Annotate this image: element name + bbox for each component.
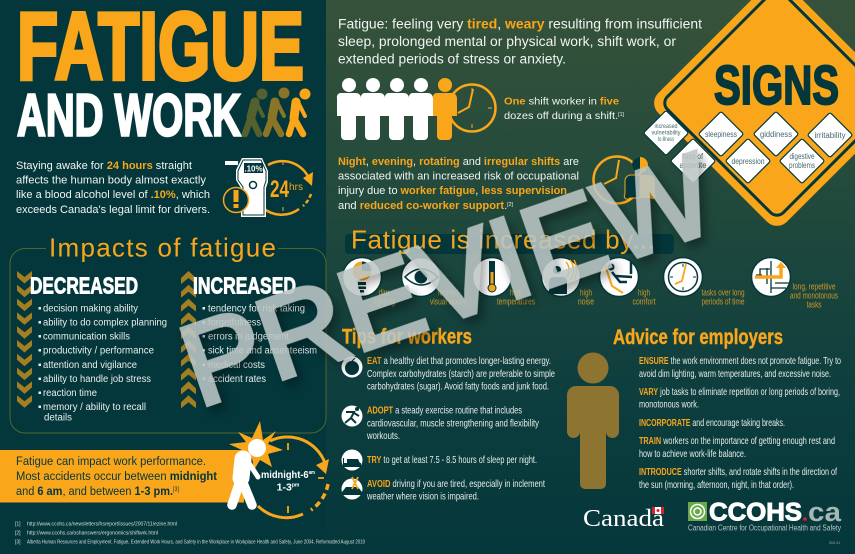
text block: tips for workers: TRY to get at least 7.5 - 8.5 hours of sleep per night. bbox=[367, 454, 537, 466]
sign: digestive problems bbox=[779, 138, 825, 184]
text block: 24 hours bbox=[16, 160, 210, 216]
icon: runner bbox=[342, 406, 362, 426]
text block: references: [2] bbox=[15, 530, 21, 536]
icon: clock with sun and walking figure: pm bbox=[292, 482, 300, 488]
heading: tips for workers: Tips for workers bbox=[342, 326, 472, 348]
panel: left background bbox=[0, 0, 326, 554]
list: decreased: communication skills bbox=[43, 332, 130, 342]
sign: loss of appetite: loss of bbox=[683, 152, 704, 161]
list: decreased: ▪ bbox=[38, 332, 42, 342]
list: decreased: attention and vigilance bbox=[43, 360, 137, 371]
icon: up chevrons bbox=[181, 271, 196, 408]
labels: fatigue factors: long, repetitive bbox=[792, 282, 836, 292]
sign: depression: depression bbox=[732, 157, 764, 166]
text block: definition of fatigue: extended periods of stress or anxiety. bbox=[338, 52, 566, 66]
list: increased: sick time and absenteeism bbox=[208, 346, 317, 356]
icon: five workers and clock bbox=[337, 78, 496, 140]
text block: one in five: dozes off during a shift. bbox=[504, 110, 612, 122]
heading: impacts of fatigue: Impacts of fatigue bbox=[49, 232, 276, 262]
sign: loss of appetite: appetite bbox=[680, 161, 707, 170]
text block: definition of fatigue bbox=[338, 16, 702, 66]
labels: fatigue factors: comfort bbox=[632, 296, 656, 306]
list: decreased: ▪ bbox=[38, 374, 42, 385]
icon: breathalyzer and 24 hours clock: .10% bbox=[244, 164, 263, 174]
logo: CCOHS bbox=[688, 497, 842, 532]
heading: decreased: DECREASED bbox=[30, 272, 138, 298]
icon: clock with sun and walking figure bbox=[229, 421, 329, 518]
text block: shifts: [2] bbox=[507, 202, 514, 208]
list: decreased: ▪ bbox=[38, 402, 42, 413]
heading: advice for employers: Advice for employers bbox=[613, 326, 783, 349]
icon: breathalyzer and 24 hours clock bbox=[224, 158, 313, 217]
logo: Canada wordmark: Canada bbox=[583, 506, 664, 532]
labels: fatigue factors: visual acuity bbox=[430, 296, 466, 306]
labels: fatigue factors: high bbox=[638, 288, 650, 298]
list: decreased: ability to do complex planning bbox=[43, 318, 167, 328]
list: increased: accident rates bbox=[208, 374, 266, 385]
list: decreased: ability to handle job stress bbox=[43, 374, 151, 385]
heading: increased: INCREASED bbox=[193, 272, 296, 298]
icon: clock and half-lit worker bbox=[594, 156, 656, 204]
list: increased: tendency for risk taking bbox=[208, 304, 305, 314]
list: increased: ▪ bbox=[202, 360, 206, 371]
sign: increased vulnerability to illness bbox=[643, 110, 689, 156]
list: decreased: reaction time bbox=[43, 388, 97, 399]
icon: repetitive tasks bbox=[752, 258, 790, 296]
callout: accident times band bbox=[0, 450, 244, 502]
list: decreased: ▪ bbox=[38, 388, 42, 399]
icon: high comfort bbox=[600, 258, 638, 296]
heading band: fatigue is increased by: Fatigue is increased by... bbox=[351, 224, 655, 254]
sign: depression bbox=[725, 138, 771, 184]
labels: fatigue factors: tasks bbox=[806, 300, 822, 310]
text block: tips for workers: workouts. bbox=[366, 430, 400, 442]
list: increased: forgetfulness bbox=[208, 318, 261, 328]
list: increased: ▪ bbox=[202, 332, 206, 342]
text block: one in five bbox=[504, 96, 625, 122]
icon: tired walkers bbox=[245, 88, 310, 134]
text block: references: [1] bbox=[15, 522, 21, 528]
callout: accident times band: Fatigue can impact work performance. bbox=[16, 454, 206, 468]
panel: signs diamond bbox=[643, 0, 855, 232]
list: increased: medical costs bbox=[208, 360, 265, 371]
sign: sleepiness bbox=[698, 111, 744, 157]
text block: references: [3] bbox=[15, 540, 21, 546]
panel: right background bbox=[326, 0, 855, 554]
sign: loss of appetite bbox=[670, 138, 716, 184]
icon: apple bbox=[342, 356, 362, 378]
sign: sleepiness: sleepiness bbox=[705, 130, 737, 139]
list: decreased: ▪ bbox=[38, 360, 42, 371]
list: decreased: decision making ability bbox=[43, 304, 138, 314]
icon: clock with sun and walking figure: midnight-6 bbox=[261, 469, 315, 481]
text block: advice for employers bbox=[639, 355, 841, 491]
sign: giddiness bbox=[753, 111, 799, 157]
text block: tips for workers: Complex carbohydrates (starch) are preferable to simple bbox=[367, 368, 555, 380]
text block: shifts: and reduced co-worker support . bbox=[338, 200, 507, 212]
list: increased: ▪ bbox=[202, 318, 206, 328]
labels: fatigue factors: limited bbox=[438, 288, 458, 298]
labels: fatigue factors bbox=[373, 282, 838, 310]
icon: down chevrons bbox=[17, 271, 32, 408]
list: decreased: memory / ability to recall bbox=[43, 402, 146, 413]
text block: tips for workers: EAT a healthy diet that promotes longer-lasting energy. bbox=[367, 355, 551, 367]
list: decreased: productivity / performance bbox=[43, 346, 154, 356]
list: increased: ▪ bbox=[202, 346, 206, 356]
icon: long periods of time bbox=[664, 258, 702, 296]
logo: CCOHS: ca bbox=[808, 497, 842, 527]
text block: tips for workers: ADOPT a steady exercise routine that includes bbox=[367, 404, 522, 416]
list: decreased bbox=[38, 304, 167, 424]
labels: fatigue factors: tasks over long bbox=[702, 288, 744, 298]
text block: edition code: 2021-01 bbox=[829, 541, 840, 545]
text block: advice for employers: INCORPORATE and encourage taking breaks. bbox=[639, 417, 785, 429]
icon: clock with sun and walking figure: am bbox=[309, 470, 315, 476]
text block: 24 hours: like a blood alcohol level of .10%, which bbox=[16, 189, 210, 201]
title: And Work: AND WORK bbox=[17, 83, 241, 149]
text block: shifts: Night, evening, rotating and irregular shifts are bbox=[338, 156, 579, 168]
text block: references: http://www.ccohs.ca/newsletters/hsreport/issues/2007/11/ezine.html bbox=[27, 522, 177, 528]
text block: advice for employers: how to achieve work-life balance. bbox=[639, 448, 746, 460]
text block: shifts bbox=[338, 156, 579, 212]
panel: impacts of fatigue bbox=[10, 232, 326, 433]
text block: definition of fatigue: sleep, prolonged mental or physical work, shift work, or bbox=[338, 34, 677, 49]
icon: dim lighting bbox=[342, 258, 382, 296]
text block: 24 hours: exceeds Canada's legal limit for drivers. bbox=[16, 204, 210, 216]
sign: giddiness: giddiness bbox=[760, 130, 792, 139]
sign: irritability bbox=[807, 112, 853, 158]
text block: advice for employers: monotonous work. bbox=[639, 398, 699, 410]
sign: irritability: irritability bbox=[814, 131, 846, 140]
icon: limited visual acuity bbox=[402, 258, 440, 296]
text block: 24 hours: Staying awake for 24 hours straight bbox=[16, 160, 193, 172]
icon: breathalyzer and 24 hours clock: hrs bbox=[289, 182, 303, 193]
icon: clock with sun and walking figure: 1-3 bbox=[277, 482, 292, 494]
labels: fatigue factors: high bbox=[580, 288, 592, 298]
icon: walking figure bbox=[232, 459, 258, 505]
sign: digestive problems: digestive bbox=[790, 152, 815, 161]
callout: accident times band: [3] bbox=[173, 487, 179, 493]
labels: fatigue factors: temperatures bbox=[497, 296, 535, 306]
text block: definition of fatigue: Fatigue: feeling very tired, weary resulting from insufficient bbox=[338, 16, 702, 32]
labels: fatigue factors: periods of time bbox=[702, 296, 744, 306]
text block: 24 hours: affects the human body almost exactly bbox=[16, 174, 206, 186]
list: decreased: ▪ bbox=[38, 346, 42, 356]
text block: references: Alberta Human Resources and Employment. Fatigue, Extended Work Hours, and Safety in the Workplace in Workplace Health and Safety, June 2004, Reformatted August 2010 bbox=[27, 540, 365, 546]
text block: one in five: [1] bbox=[618, 112, 625, 118]
icon: bed bbox=[342, 450, 362, 470]
list: increased bbox=[202, 304, 317, 385]
watermark: preview: PREVIEW bbox=[165, 128, 730, 431]
labels: fatigue factors: noise bbox=[578, 296, 594, 306]
text block: references bbox=[15, 522, 365, 546]
list: increased: errors in judgement bbox=[208, 332, 289, 342]
text block: shifts: injury due to worker fatigue, less supervision bbox=[338, 185, 567, 197]
sign: digestive problems: problems bbox=[789, 161, 815, 170]
sign: increased vulnerability to illness: increased bbox=[654, 124, 678, 130]
text block: tips for workers: AVOID driving if you are tired, especially in inclement bbox=[367, 478, 545, 490]
list: decreased: ▪ bbox=[38, 304, 42, 314]
icon: sun bbox=[229, 421, 283, 470]
callout: accident times band: Most accidents occur between midnight bbox=[16, 469, 217, 483]
text block: one in five: One shift worker in five bbox=[504, 96, 619, 108]
labels: fatigue factors: dim bbox=[378, 288, 390, 298]
icon: high temperatures bbox=[472, 258, 512, 296]
labels: fatigue factors: lighting bbox=[373, 296, 395, 306]
sign: increased vulnerability to illness: to illness bbox=[658, 137, 674, 143]
list: increased: ▪ bbox=[202, 374, 206, 385]
icon: car bbox=[342, 477, 362, 500]
logo: CCOHS: CCOHS bbox=[709, 498, 802, 526]
text block: references: http://www.ccohs.ca/oshanswers/ergonomics/shiftwrk.html bbox=[27, 530, 158, 536]
icon: high noise bbox=[542, 258, 580, 296]
sign: increased vulnerability to illness: vulnerability bbox=[652, 130, 680, 136]
list: decreased: ▪ bbox=[38, 318, 42, 328]
icon: breathalyzer and 24 hours clock: 24 bbox=[270, 176, 289, 203]
list: increased: ▪ bbox=[202, 304, 206, 314]
text block: tips for workers: carbohydrates (sugar). Avoid fatty foods and junk food. bbox=[367, 380, 549, 392]
text block: tips for workers bbox=[366, 355, 555, 502]
callout: accident times band: and 6 am, and between 1-3 pm. bbox=[16, 484, 178, 498]
labels: fatigue factors: high bbox=[510, 288, 522, 298]
list: decreased: details bbox=[44, 412, 72, 424]
text block: shifts: associated with an increased risk of occupational bbox=[338, 170, 579, 182]
text block: tips for workers: weather where vision is impaired. bbox=[366, 490, 479, 502]
text block: tips for workers: cardiovascular, muscle strengthening and flexibility bbox=[367, 418, 540, 430]
icon: employer figure bbox=[567, 352, 619, 489]
